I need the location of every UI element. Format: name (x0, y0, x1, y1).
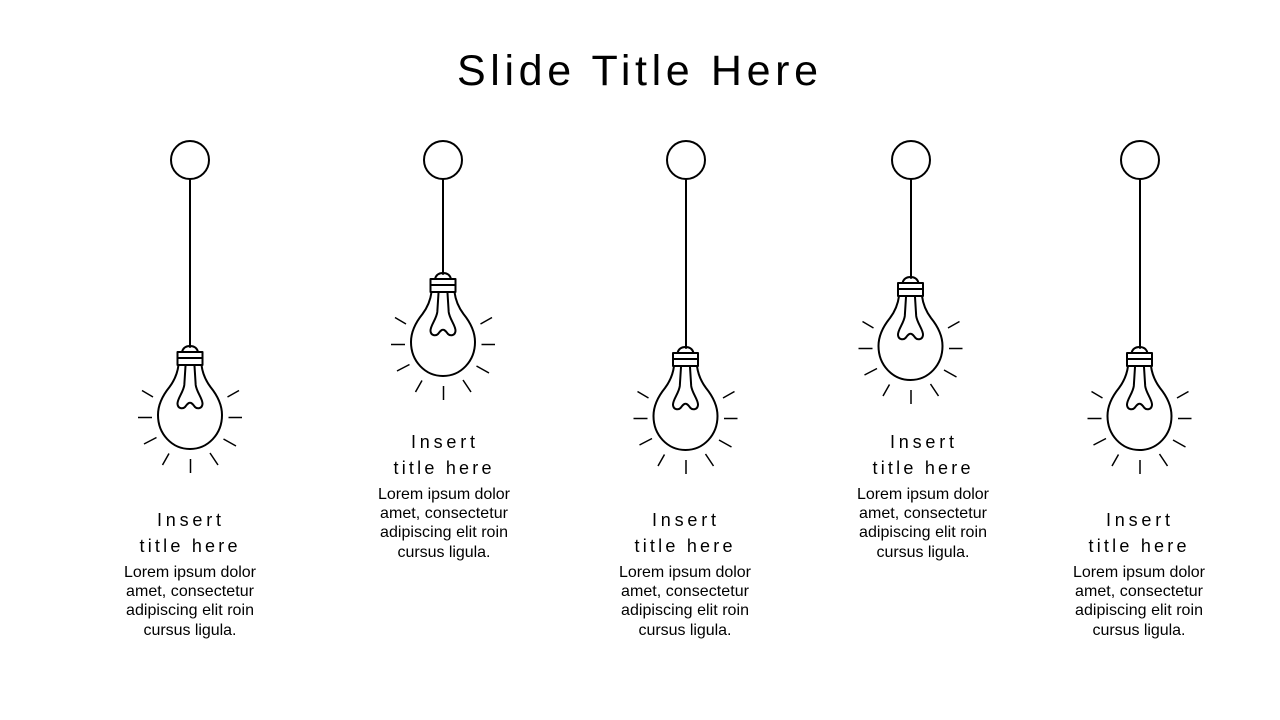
text block: bulb 4: Insert (890, 432, 954, 452)
text block: bulb 1: Lorem ipsum dolor (124, 564, 257, 581)
text block: bulb 1: title here (140, 536, 238, 556)
text block: bulb 3: amet, consectetur (621, 583, 750, 600)
text block: bulb 5: Insert (1106, 510, 1170, 530)
text block: bulb 2: Lorem ipsum dolor (378, 486, 511, 503)
text block: bulb 5: title here (1088, 536, 1186, 556)
icon: hanging bulb 2 (391, 141, 495, 400)
text block: bulb 3: Lorem ipsum dolor (619, 564, 752, 581)
text block: bulb 2: adipiscing elit roin (380, 524, 508, 541)
text block: bulb 2: Insert (411, 432, 475, 452)
text block: bulb 5: amet, consectetur (1075, 583, 1204, 600)
text block: bulb 4 (857, 432, 990, 561)
text block: bulb 1: amet, consectetur (126, 583, 255, 600)
text block: bulb 3: adipiscing elit roin (621, 602, 749, 619)
text block: bulb 4: Lorem ipsum dolor (857, 486, 990, 503)
text block: bulb 4: title here (872, 458, 970, 478)
text block: bulb 4: amet, consectetur (859, 505, 988, 522)
text block: bulb 4: adipiscing elit roin (859, 524, 987, 541)
panel: bulb 1 (124, 141, 257, 639)
text block: bulb 3: cursus ligula. (638, 622, 732, 639)
text block: bulb 3: title here (634, 536, 732, 556)
text block: bulb 5: cursus ligula. (1092, 622, 1186, 639)
text block: bulb 4: cursus ligula. (876, 544, 970, 561)
text block: bulb 3 (619, 510, 752, 639)
text block: bulb 2: title here (394, 458, 492, 478)
text block: bulb 2: cursus ligula. (398, 544, 490, 561)
icon: hanging bulb 3 (634, 141, 738, 474)
panel: bulb 5 (1073, 141, 1206, 639)
text block: bulb 3: Insert (652, 510, 716, 530)
panel: bulb 4 (857, 141, 990, 561)
icon: hanging bulb 4 (858, 141, 962, 404)
icon: hanging bulb 1 (138, 141, 242, 473)
text block: bulb 2 (378, 432, 511, 561)
text block: bulb 5: adipiscing elit roin (1075, 602, 1203, 619)
text block: bulb 1: Insert (157, 510, 221, 530)
text block: bulb 1: cursus ligula. (144, 622, 236, 639)
text block: bulb 1 (124, 510, 257, 639)
title: Slide Title Here (457, 47, 818, 95)
text block: bulb 1: adipiscing elit roin (126, 602, 254, 619)
icon: hanging bulb 5 (1088, 141, 1192, 474)
panel: bulb 2 (378, 141, 511, 561)
text block: bulb 2: amet, consectetur (380, 505, 509, 522)
panel: bulb 3 (619, 141, 752, 639)
text block: bulb 5: Lorem ipsum dolor (1073, 564, 1206, 581)
text block: bulb 5 (1073, 510, 1206, 639)
